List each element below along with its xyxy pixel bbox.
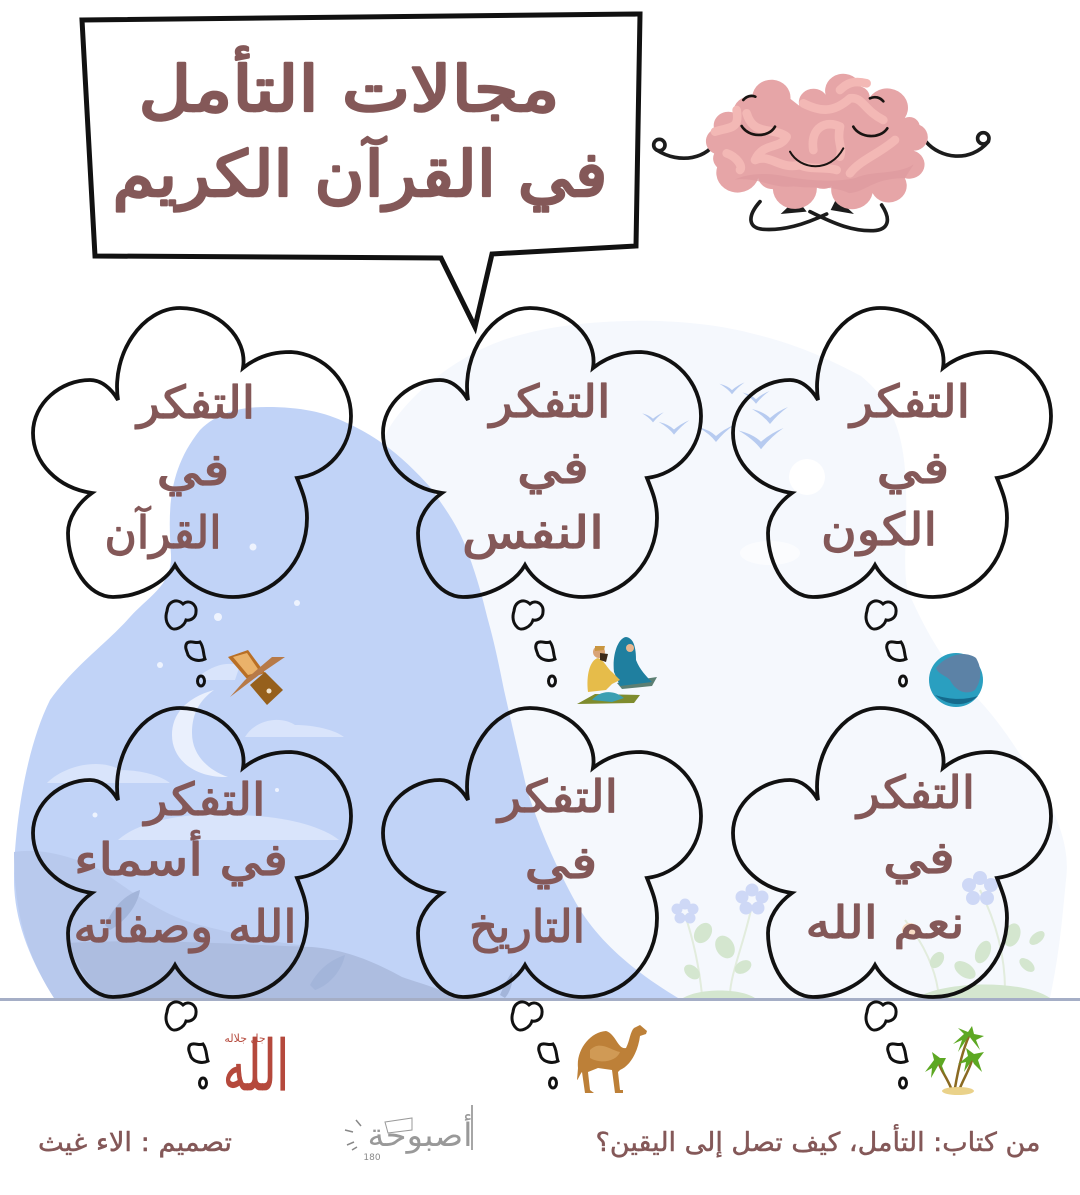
cloud: reflecting on the Quran [33, 308, 351, 597]
footer: source book: من كتاب: التأمل، كيف تصل إلى اليقين؟ [596, 1123, 1040, 1158]
icon: Allah calligraphy [223, 1025, 289, 1107]
decoration: pale clouds [47, 664, 344, 840]
footer: logo: 180 [363, 1153, 381, 1163]
cloud: reflecting on the self: النفس [462, 506, 604, 559]
decoration: flowers [672, 871, 1050, 998]
decoration: background hills and leaves [14, 851, 513, 998]
brain feet [781, 198, 854, 214]
cloud: reflecting on history: التاريخ [469, 900, 585, 953]
title line 1: مجالات التأمل [138, 46, 560, 126]
cloud: reflecting on the Quran: القرآن [104, 505, 222, 559]
cloud: reflecting on the Quran: التفكر [135, 376, 255, 429]
icon: Allah calligraphy: الله [223, 1025, 289, 1107]
cloud: reflecting on blessings of Allah: نعم الله [806, 896, 964, 949]
cloud: reflecting on history: في [524, 836, 598, 889]
icon: Allah calligraphy: جل جلاله [224, 1032, 266, 1045]
icon: globe [929, 653, 983, 707]
cloud: reflecting on blessings of Allah: التفكر [855, 766, 975, 819]
icon: camel [577, 1025, 647, 1093]
cloud: reflecting on the universe: التفكر [848, 375, 970, 428]
thought bubbles [166, 601, 907, 1088]
decoration: crescent moon [172, 690, 228, 777]
cloud: reflecting on names of Allah: في أسماء [74, 830, 288, 886]
cloud: reflecting on the universe [733, 308, 1051, 597]
cloud: reflecting on names of Allah [33, 708, 351, 997]
icon: meditating brain [654, 74, 989, 231]
cloud: reflecting on history [383, 708, 701, 997]
icon: Quran on stand [228, 650, 285, 705]
icon: palm trees [925, 1026, 984, 1095]
brain face [742, 96, 887, 166]
footer: logo: أصبوحة [368, 1114, 472, 1154]
cloud: reflecting on the universe: الكون [821, 503, 937, 556]
cloud: reflecting on names of Allah: التفكر [142, 773, 266, 826]
cloud: reflecting on the Quran: في [156, 443, 230, 496]
background: pale blue blob [383, 321, 1067, 998]
brain body [706, 74, 928, 209]
cloud: reflecting on the self [383, 308, 701, 597]
title speech bubble [82, 14, 640, 327]
cloud: reflecting on the universe: في [876, 441, 950, 494]
icon: couple praying [577, 637, 657, 704]
decoration: white spots on pale blob [740, 459, 825, 565]
cloud: reflecting on blessings of Allah [733, 708, 1051, 997]
footer: designer credit: تصميم : الاء غيث [38, 1128, 232, 1158]
title line 2: في القرآن الكريم [112, 136, 608, 212]
cloud: reflecting on the self: في [517, 441, 589, 494]
cloud: reflecting on history: التفكر [496, 770, 618, 823]
background: blue hill blob [14, 407, 678, 998]
ground line [0, 998, 1080, 1001]
cloud: reflecting on blessings of Allah: في [883, 831, 955, 884]
decoration: birds [642, 382, 788, 449]
brain arms and legs [654, 133, 989, 231]
cloud: reflecting on names of Allah: الله وصفاته [74, 900, 296, 954]
decoration: small white stars [92, 544, 300, 818]
cloud: reflecting on the self: التفكر [487, 375, 610, 428]
brain folds [715, 82, 895, 173]
footer: logo [345, 1105, 472, 1163]
